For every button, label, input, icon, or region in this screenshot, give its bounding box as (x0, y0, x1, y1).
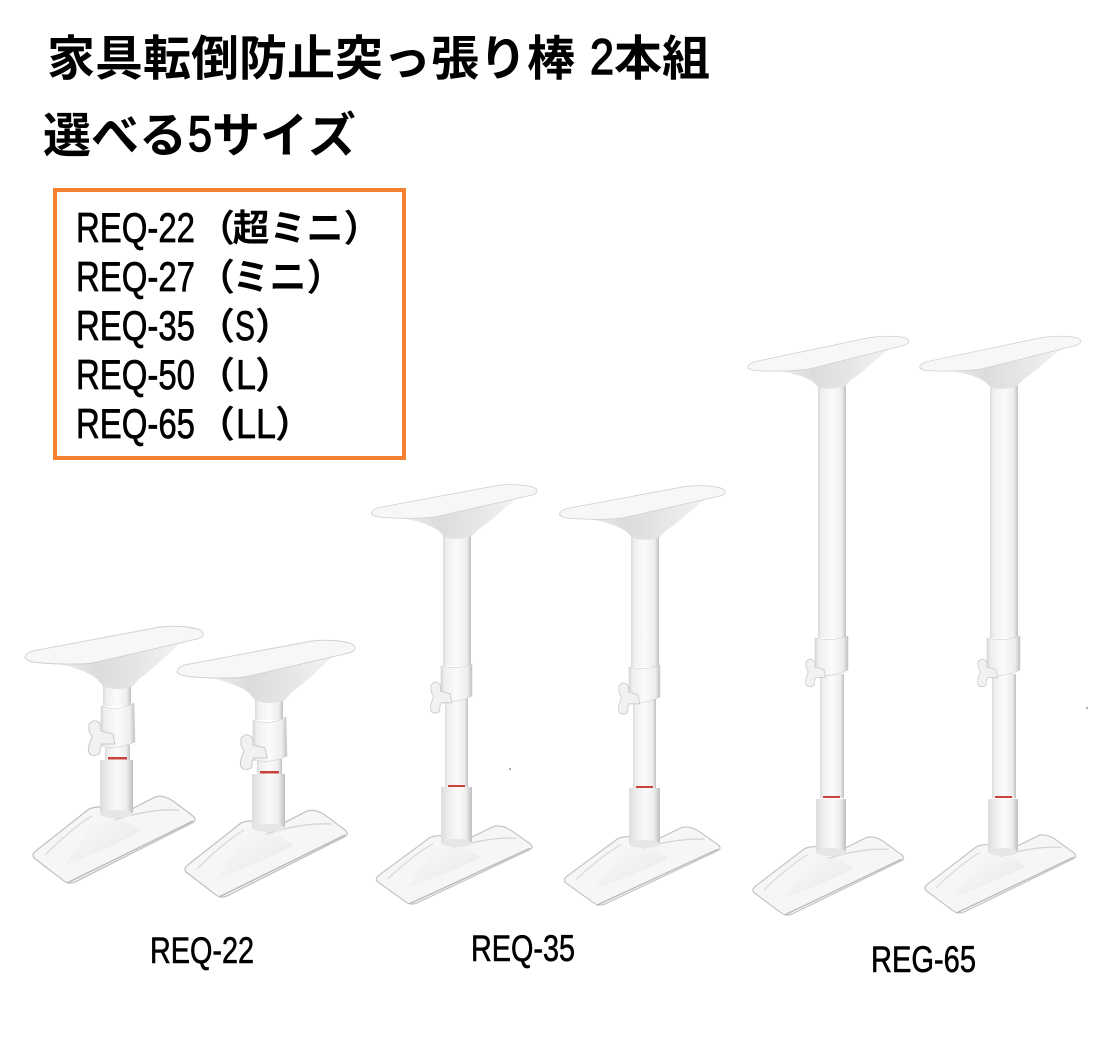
model REQ-27: REQ-27 (76, 253, 195, 300)
model REQ-50: （ (198, 345, 235, 399)
model REQ-27: （ミニ） (198, 247, 344, 301)
model REQ-22: REQ-22 (76, 204, 195, 251)
model REQ-35: ） (255, 296, 292, 350)
product: REQ-65 right (920, 335, 1081, 913)
model REQ-50: REQ-50 (76, 351, 195, 398)
model REQ-35: REQ-35 (76, 302, 195, 349)
model REQ-35: （ (198, 296, 235, 350)
model REQ-65 (76, 394, 312, 448)
model REQ-35: S (235, 302, 255, 349)
model REQ-65: （ (198, 394, 235, 448)
model REQ-65: ） (275, 394, 312, 448)
product: REQ-22 right (177, 640, 355, 897)
product: REQ-35 left (371, 484, 537, 904)
model REQ-27 (76, 247, 344, 301)
subtitle: 5 (188, 106, 212, 162)
model REQ-65: REQ-65 (76, 400, 195, 447)
subtitle: 選べる (43, 96, 187, 166)
model REQ-50: L (236, 351, 256, 398)
model REQ-22: （超ミニ） (198, 198, 380, 252)
model REQ-50: ） (255, 345, 292, 399)
label: REQ-35: REQ-35 (471, 928, 575, 969)
panel: model list (55, 190, 404, 458)
subtitle (43, 96, 356, 166)
label: REQ-22: REQ-22 (150, 930, 254, 971)
model REQ-65: LL (236, 400, 276, 447)
product: REQ-65 left (748, 335, 909, 915)
model REQ-35 (76, 296, 292, 350)
subtitle: サイズ (212, 96, 356, 166)
title: 家具転倒防止突っ張り棒 (47, 19, 575, 89)
title: pack count: 2 (590, 29, 614, 85)
model REQ-22 (76, 198, 380, 252)
title: pack count: 本組 (614, 19, 710, 89)
product: REQ-35 right (559, 485, 725, 905)
product: REQ-22 left (25, 626, 203, 883)
label: REG-65: REG-65 (871, 939, 976, 980)
model REQ-50 (76, 345, 292, 399)
